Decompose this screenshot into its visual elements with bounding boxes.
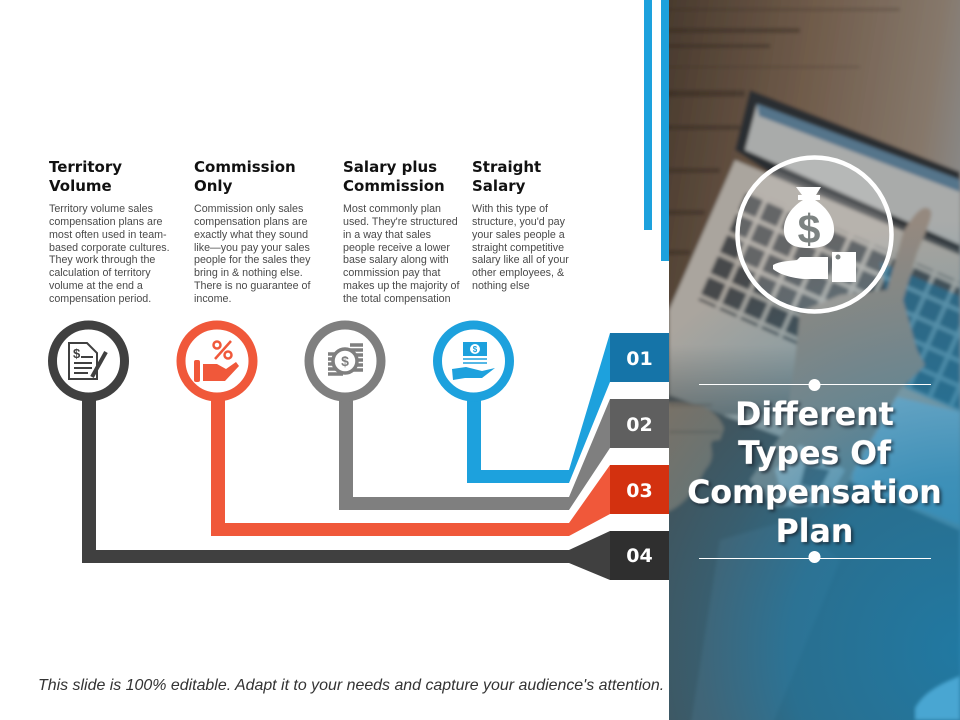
text: Commission Only description: bring in & nothing else. [194, 267, 303, 279]
lid [734, 90, 960, 252]
text: Commission Only description: like—you pay your sales [194, 242, 310, 254]
text: Straight Salary description: your sales people a [472, 229, 565, 241]
text: Territory Volume description: most often used in team- [49, 229, 167, 241]
title: Different [735, 397, 894, 433]
heading: Straight Salary [472, 158, 541, 195]
text: Commission Only description: Commission only sales [194, 203, 303, 215]
text: Straight Salary description: straight competitive [472, 242, 564, 254]
text: Salary plus Commission description: in a way that sales [343, 229, 431, 241]
background photo panel [669, 0, 960, 720]
title [687, 397, 944, 550]
footer note: This slide is 100% editable. Adapt it to your needs and capture your audience's attention. [38, 677, 664, 694]
text: Territory Volume description: They work through the [49, 254, 155, 266]
text: Salary plus Commission description: people receive a lower [343, 242, 450, 254]
text: Territory Volume description: based corporate cultures. [49, 242, 170, 254]
number 03: 03 [626, 480, 653, 502]
text: Territory Volume description: volume at the end a [49, 280, 143, 292]
bottom right hand [915, 676, 960, 720]
left hand [669, 400, 726, 513]
title: Types Of [738, 436, 891, 472]
text: Salary plus Commission description: commission pay that [343, 267, 440, 279]
text: Salary plus Commission description [343, 203, 460, 305]
text: Straight Salary description [472, 203, 569, 292]
number 02: 02 [626, 414, 653, 436]
text: Straight Salary description: With this type of [472, 203, 548, 215]
text: Straight Salary description: other employees, & [472, 267, 564, 279]
icon: document and pen in dark ring: $ [73, 346, 81, 361]
colour wash [669, 248, 960, 720]
laptop corner [853, 397, 960, 525]
heading: Commission Only: Only [194, 177, 232, 195]
text: Territory Volume description [49, 203, 170, 305]
number 01: 01 [626, 348, 653, 370]
title: Compensation [687, 475, 942, 511]
text: Territory Volume description: Territory volume sales [49, 203, 153, 215]
icon: banknotes on hand in blue ring: $ [473, 345, 478, 354]
text: Salary plus Commission description: makes up the majority of [343, 280, 459, 292]
heading: Salary plus Commission: Salary plus [343, 158, 437, 176]
watch [775, 445, 845, 505]
text: Commission Only description: There is no guarantee of [194, 280, 310, 292]
text: Straight Salary description: salary like all of your [472, 254, 569, 266]
heading: Salary plus Commission: Commission [343, 177, 445, 195]
text: Salary plus Commission description: Most commonly plan [343, 203, 441, 215]
heading: Commission Only: Commission [194, 158, 296, 176]
title: Plan [776, 514, 853, 550]
lower body [650, 395, 960, 720]
heading: Territory Volume: Territory [49, 158, 122, 176]
text: Commission Only description: exactly what they sound [194, 229, 308, 241]
number 04: 04 [626, 545, 653, 567]
keyboard [698, 188, 960, 412]
text: Salary plus Commission description: the total compensation [343, 293, 451, 305]
base [669, 158, 960, 482]
text: Straight Salary description: nothing else [472, 280, 530, 292]
arm and hand [750, 208, 931, 507]
heading: Straight Salary: Salary [472, 177, 525, 195]
text: Commission Only description: income. [194, 293, 231, 305]
heading: Territory Volume [49, 158, 122, 195]
text: Territory Volume description: compensation plans are [49, 216, 162, 228]
text: Commission Only description: compensation plans are [194, 216, 307, 228]
text: Salary plus Commission description: used. They're structured [343, 216, 458, 228]
icon: coin stacks in gray ring: $ [341, 353, 349, 369]
text: Straight Salary description: structure, you'd pay [472, 216, 565, 228]
heading: Straight Salary: Straight [472, 158, 541, 176]
emblem: money bag on hand in white ring: $ [798, 206, 821, 252]
heading: Salary plus Commission [343, 158, 445, 195]
heading: Commission Only [194, 158, 296, 195]
text: Commission Only description [194, 203, 310, 305]
text: Salary plus Commission description: base salary along with [343, 254, 449, 266]
text: Territory Volume description: compensation period. [49, 293, 151, 305]
heading: Territory Volume: Volume [49, 177, 112, 195]
text: Territory Volume description: calculation of territory [49, 267, 151, 279]
text: Commission Only description: people for the sales they [194, 254, 310, 266]
